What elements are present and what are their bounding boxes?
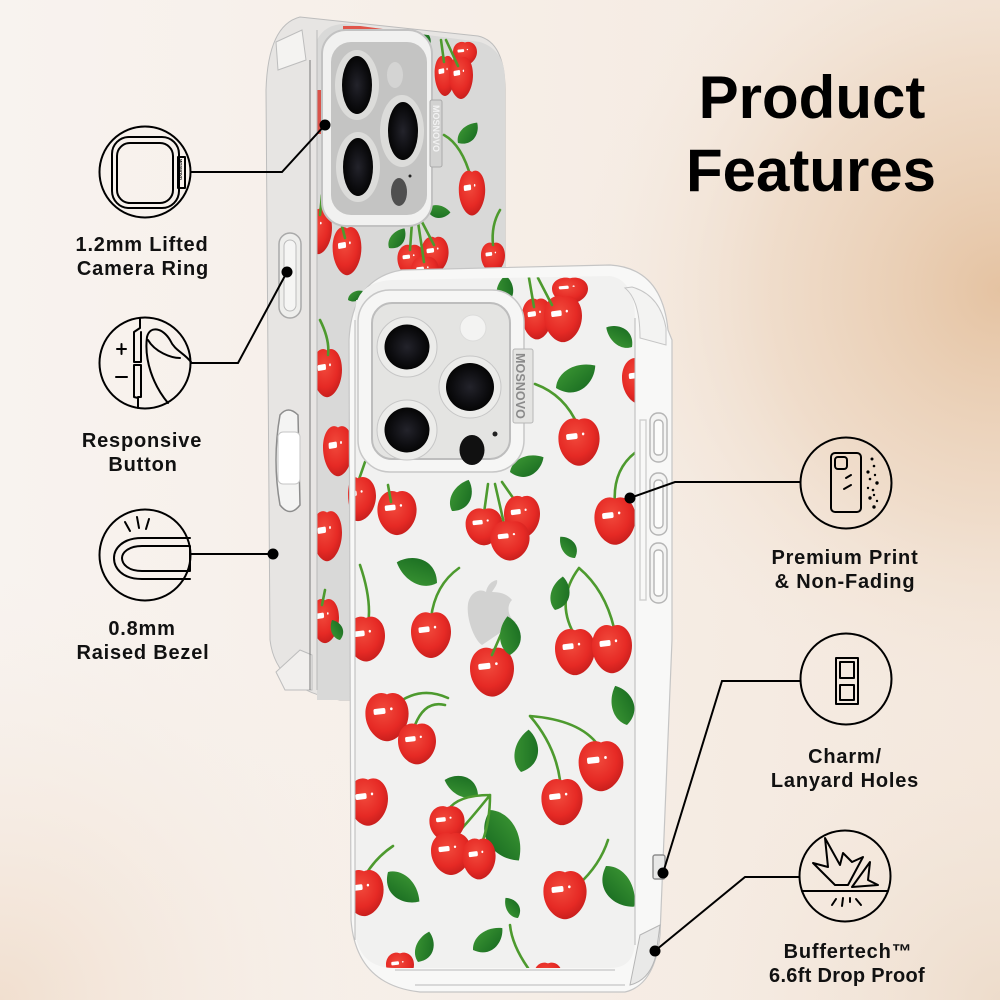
sensor [460,435,484,465]
label: 0.8mm [108,618,176,640]
callout: premium print [624,438,919,593]
label: Charm/ [808,746,882,768]
back side button bottom [276,410,300,512]
camera island: MOSNOVO [513,353,527,419]
back camera island [322,30,442,226]
icon: impact [800,830,890,922]
label: 6.6ft Drop Proof [769,965,925,987]
callout: buffertech drop proof [650,830,925,987]
leader line [191,272,287,363]
callout: responsive button [82,266,292,476]
front case body [349,265,672,992]
front print area [355,277,634,968]
camera island [358,290,533,472]
leader line [191,553,273,555]
label: Responsive [82,430,202,452]
title: Features [686,137,936,204]
label: Raised Bezel [76,642,210,664]
label: Button [108,454,178,476]
back phone case [266,17,507,710]
icon: bezel [100,510,190,600]
back case print area [304,20,507,710]
leader line [630,482,800,498]
leader line [663,681,801,873]
leader line [191,125,325,172]
label [82,430,202,476]
label: 1.2mm Lifted [76,234,208,256]
back camera island: MOSNOVO [431,105,441,152]
label [76,618,210,664]
brand tab [513,349,533,423]
apple logo [468,580,516,645]
label: Premium Print [771,547,919,569]
back case corner bumpers [276,30,306,70]
lens 1 [377,317,437,377]
flash [460,315,486,341]
callout: charm lanyard holes [658,634,919,878]
icon: holes [800,634,892,724]
callout: lifted camera ring [76,120,330,280]
title [686,64,936,204]
title: Product [699,64,925,131]
right side buttons [640,413,667,879]
back case body [266,17,505,700]
label [769,941,925,987]
icon: camera ring: MOSNOVO [178,159,184,180]
label [76,234,209,280]
lens 2 [439,356,501,418]
label: Lanyard Holes [771,770,919,792]
leader line [656,877,800,950]
front phone case [340,265,672,992]
icon: camera ring [100,126,190,218]
front case corner bumpers [625,287,666,345]
label: Camera Ring [77,258,209,280]
back side button top [279,233,301,318]
label: Buffertech™ [784,941,912,963]
label: & Non-Fading [775,571,915,593]
label [771,746,919,792]
lens 3 [377,400,437,460]
icon: button press [100,318,191,408]
cherries print [356,277,634,968]
icon: phone with sparkles [800,438,892,528]
callout: raised bezel [76,510,278,664]
label [771,547,919,593]
front bottom edge [395,970,625,985]
